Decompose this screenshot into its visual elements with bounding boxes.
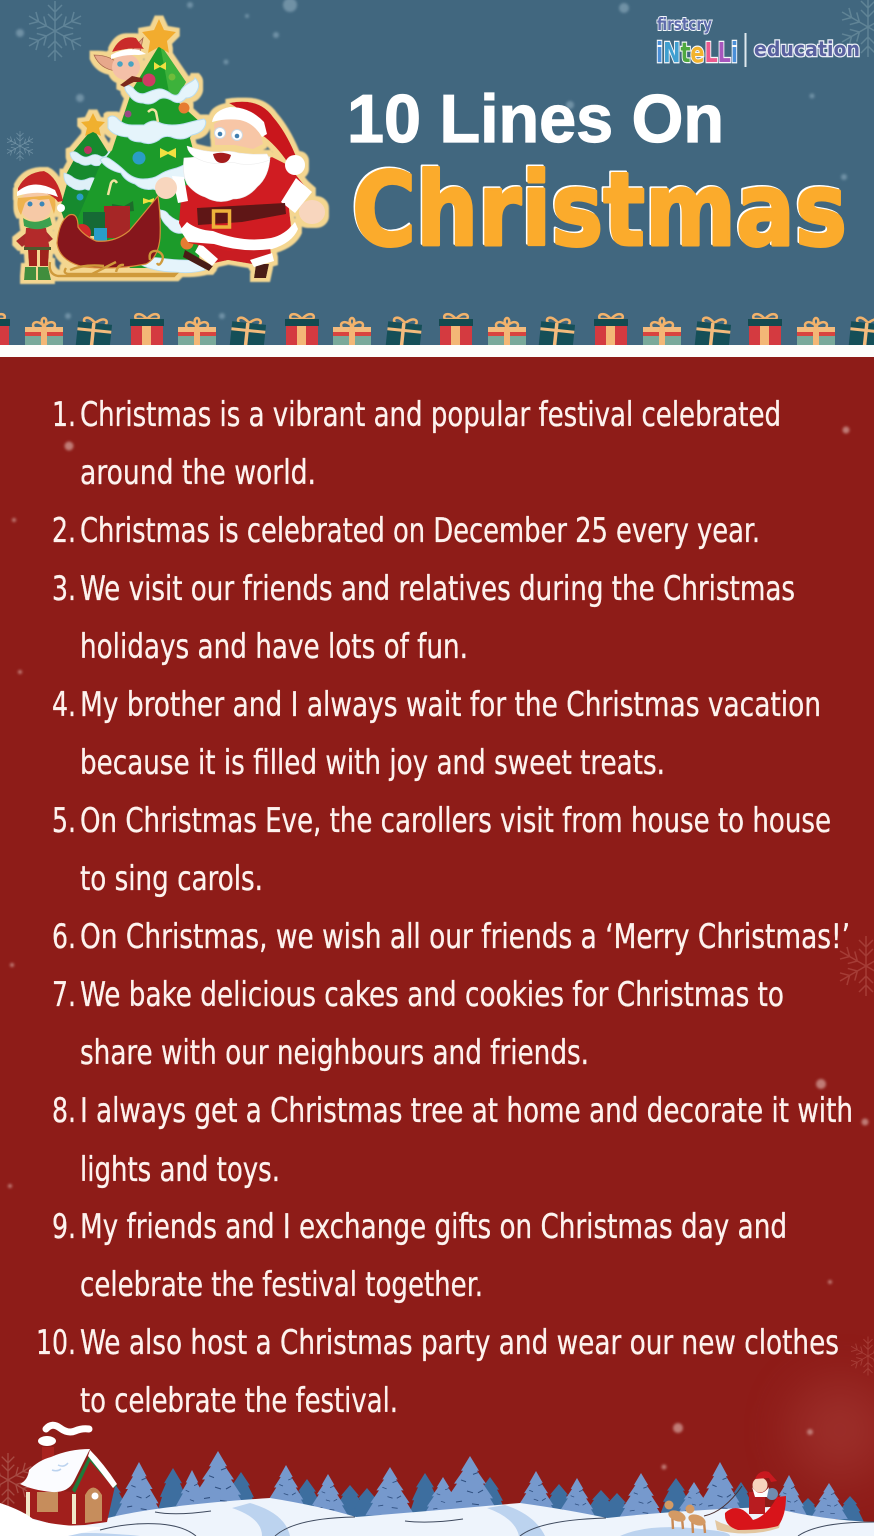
illustration: Santa, trees, elf and sleigh <box>16 19 325 280</box>
line 2: Christmas is celebrated on December 25 every year. <box>80 511 760 551</box>
logo word education: education <box>754 37 860 61</box>
rabbit <box>94 37 146 87</box>
line 4: 4. <box>52 685 76 725</box>
gift border row <box>0 314 874 350</box>
line 4 <box>52 685 821 783</box>
pine trees <box>94 1451 864 1526</box>
panel: header background <box>0 0 874 346</box>
snow bank left <box>0 1503 104 1536</box>
logo divider <box>744 33 746 67</box>
line 5 <box>52 801 831 899</box>
line 6: 6. <box>52 917 76 957</box>
line 10: to celebrate the festival. <box>80 1381 398 1421</box>
line 1: 1. <box>52 395 76 435</box>
line 5: to sing carols. <box>80 859 263 899</box>
line 9 <box>52 1207 787 1305</box>
line 7 <box>52 975 784 1073</box>
line 2: 2. <box>52 511 76 551</box>
Santa <box>155 102 325 278</box>
snow-covered house <box>20 1425 117 1526</box>
line 10 <box>36 1323 839 1421</box>
line 8: lights and toys. <box>80 1150 280 1190</box>
sleigh with gifts <box>50 196 176 276</box>
large tree <box>72 19 206 273</box>
line 8: 8. <box>52 1091 76 1131</box>
logo: firstcry intelli education <box>656 15 860 69</box>
snow hills <box>0 1498 874 1536</box>
header snow decorations <box>5 0 874 319</box>
line 7: 7. <box>52 975 76 1015</box>
line 10: 10. <box>36 1323 76 1363</box>
logo word intelli: iNteLLi <box>656 36 738 69</box>
reindeer and sleigh with Santa <box>664 1471 786 1534</box>
winter landscape footer <box>0 1425 874 1536</box>
line 1: around the world. <box>80 453 316 493</box>
white snow strip <box>0 345 874 357</box>
title: 10 Lines On: 10 Lines On <box>347 81 724 157</box>
logo word firstcry: firstcry <box>657 15 712 35</box>
line 9: celebrate the festival together. <box>80 1265 483 1305</box>
line 8 <box>52 1091 853 1190</box>
small tree <box>60 113 120 225</box>
red panel snow decorations <box>0 426 874 1507</box>
line 5: 5. <box>52 801 76 841</box>
panel: red content background <box>0 357 874 1536</box>
line 9: 9. <box>52 1207 76 1247</box>
line 1 <box>52 395 781 493</box>
line 3 <box>52 569 795 667</box>
line 4: because it is filled with joy and sweet treats. <box>80 743 665 783</box>
line 3: 3. <box>52 569 76 609</box>
line 3: holidays and have lots of fun. <box>80 627 468 667</box>
elf <box>16 171 65 280</box>
numbered list of ten lines <box>36 395 853 1421</box>
line 7: share with our neighbours and friends. <box>80 1033 589 1073</box>
